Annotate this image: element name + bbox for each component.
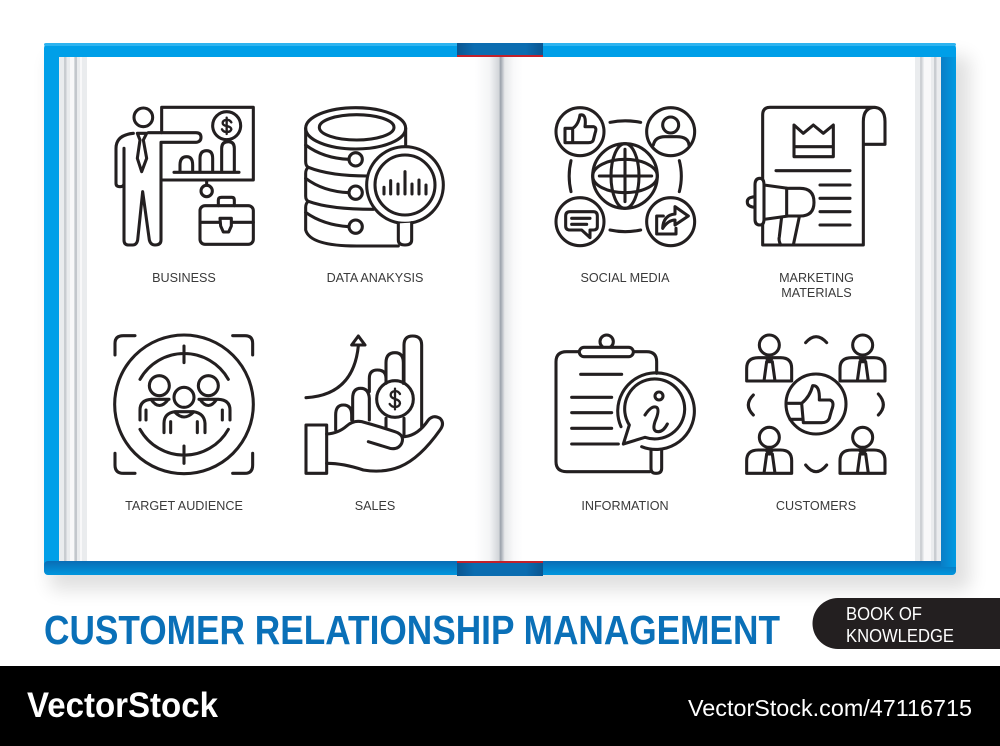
label: data analysis: DATA ANAKYSIS xyxy=(327,271,423,285)
footer logo: VectorStock xyxy=(27,686,219,725)
badge: book of knowledge: KNOWLEDGE xyxy=(846,625,954,646)
badge: book of knowledge xyxy=(813,598,1000,649)
pages xyxy=(59,57,941,561)
icon: sales xyxy=(306,336,442,473)
book shadow xyxy=(50,56,970,590)
label: business: BUSINESS xyxy=(152,271,216,285)
badge: book of knowledge: BOOK OF xyxy=(846,603,922,624)
bottom spine tab xyxy=(457,561,543,576)
icon: customers xyxy=(747,335,885,473)
label: customers: CUSTOMERS xyxy=(776,499,856,513)
person: top right xyxy=(840,335,885,381)
label: marketing materials: MARKETING xyxy=(779,271,854,285)
icon: target audience xyxy=(115,335,253,474)
panel: book xyxy=(44,43,956,576)
label: information: INFORMATION xyxy=(581,499,669,513)
icon: marketing materials xyxy=(747,107,885,245)
footer bar xyxy=(0,666,1000,746)
footer url: VectorStock.com/47116715 xyxy=(688,695,972,721)
label: social media: SOCIAL MEDIA xyxy=(580,271,670,285)
book cover xyxy=(44,43,956,575)
icon: information xyxy=(556,335,694,473)
label: sales: SALES xyxy=(355,499,395,513)
book spine xyxy=(475,57,523,561)
label: marketing materials: MATERIALS xyxy=(781,286,852,300)
label: target audience: TARGET AUDIENCE xyxy=(125,499,243,513)
icon: business xyxy=(116,107,253,245)
top spine tab xyxy=(457,43,543,57)
person: top left xyxy=(747,335,792,381)
person: bottom left xyxy=(747,427,792,473)
icon: data analysis xyxy=(306,108,443,246)
icon: social media xyxy=(556,108,695,246)
person: bottom right xyxy=(840,427,885,473)
title: CUSTOMER RELATIONSHIP MANAGEMENT xyxy=(44,607,780,653)
